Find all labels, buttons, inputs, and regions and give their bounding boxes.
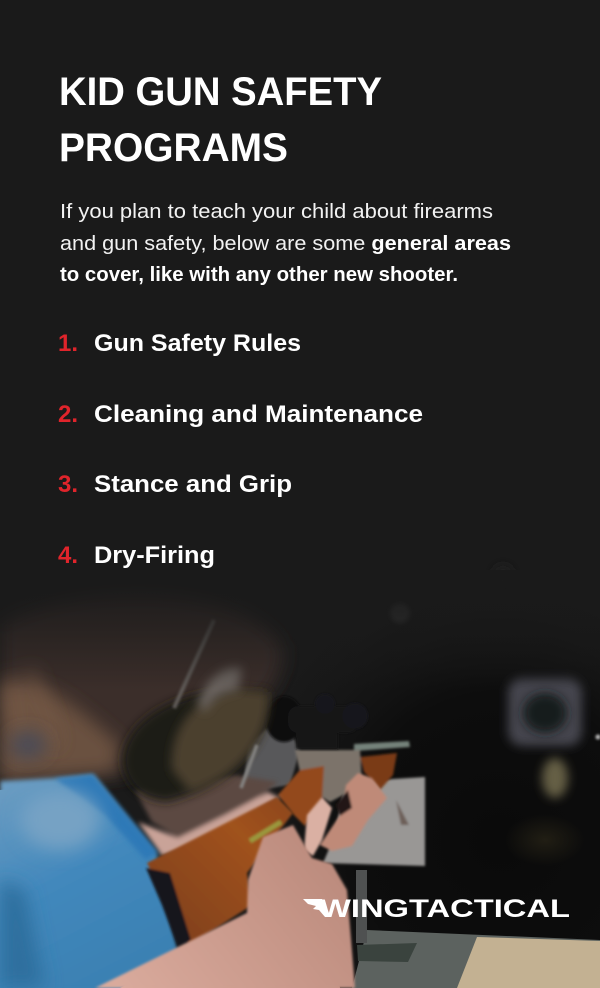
rifle forestock and barrel — [278, 741, 410, 826]
list item 3: Stance and Grip — [94, 471, 292, 498]
list: safety topics — [58, 330, 423, 569]
fade into dark background — [0, 570, 600, 690]
gripping arm and hand — [95, 825, 355, 988]
rifle scope — [265, 694, 368, 749]
title — [59, 70, 382, 170]
intro paragraph: to cover, like with any other new shooter. — [60, 263, 458, 286]
dark range backdrop — [220, 560, 600, 988]
list item 4: Dry-Firing — [94, 542, 215, 569]
intro paragraph: and gun safety, below are some general areas — [60, 232, 511, 255]
target stand box — [323, 777, 425, 866]
window behind child — [243, 715, 300, 792]
rifle stock and butt pad — [146, 797, 293, 948]
list item 4: 4. — [58, 542, 78, 569]
neck and collar skin — [135, 775, 280, 856]
list item 1: 1. — [58, 330, 78, 357]
list item 2: Cleaning and Maintenance — [94, 401, 423, 428]
shirt — [0, 774, 180, 988]
ear protection headset — [122, 620, 268, 802]
table surface — [352, 870, 600, 988]
list item 2: 2. — [58, 401, 78, 428]
intro paragraph: If you plan to teach your child about firearms — [60, 200, 493, 223]
title: PROGRAMS — [59, 126, 288, 170]
hair — [0, 594, 283, 785]
list item 1: Gun Safety Rules — [94, 330, 301, 357]
panel: background photo of child aiming a rifle — [0, 560, 600, 988]
intro paragraph — [60, 200, 511, 286]
title: KID GUN SAFETY — [59, 70, 382, 114]
logo: Wing Tactical: WINGTACTICAL — [320, 895, 570, 923]
list item 3: 3. — [58, 471, 78, 498]
supporting hand — [304, 773, 387, 856]
target on back wall — [390, 566, 600, 866]
